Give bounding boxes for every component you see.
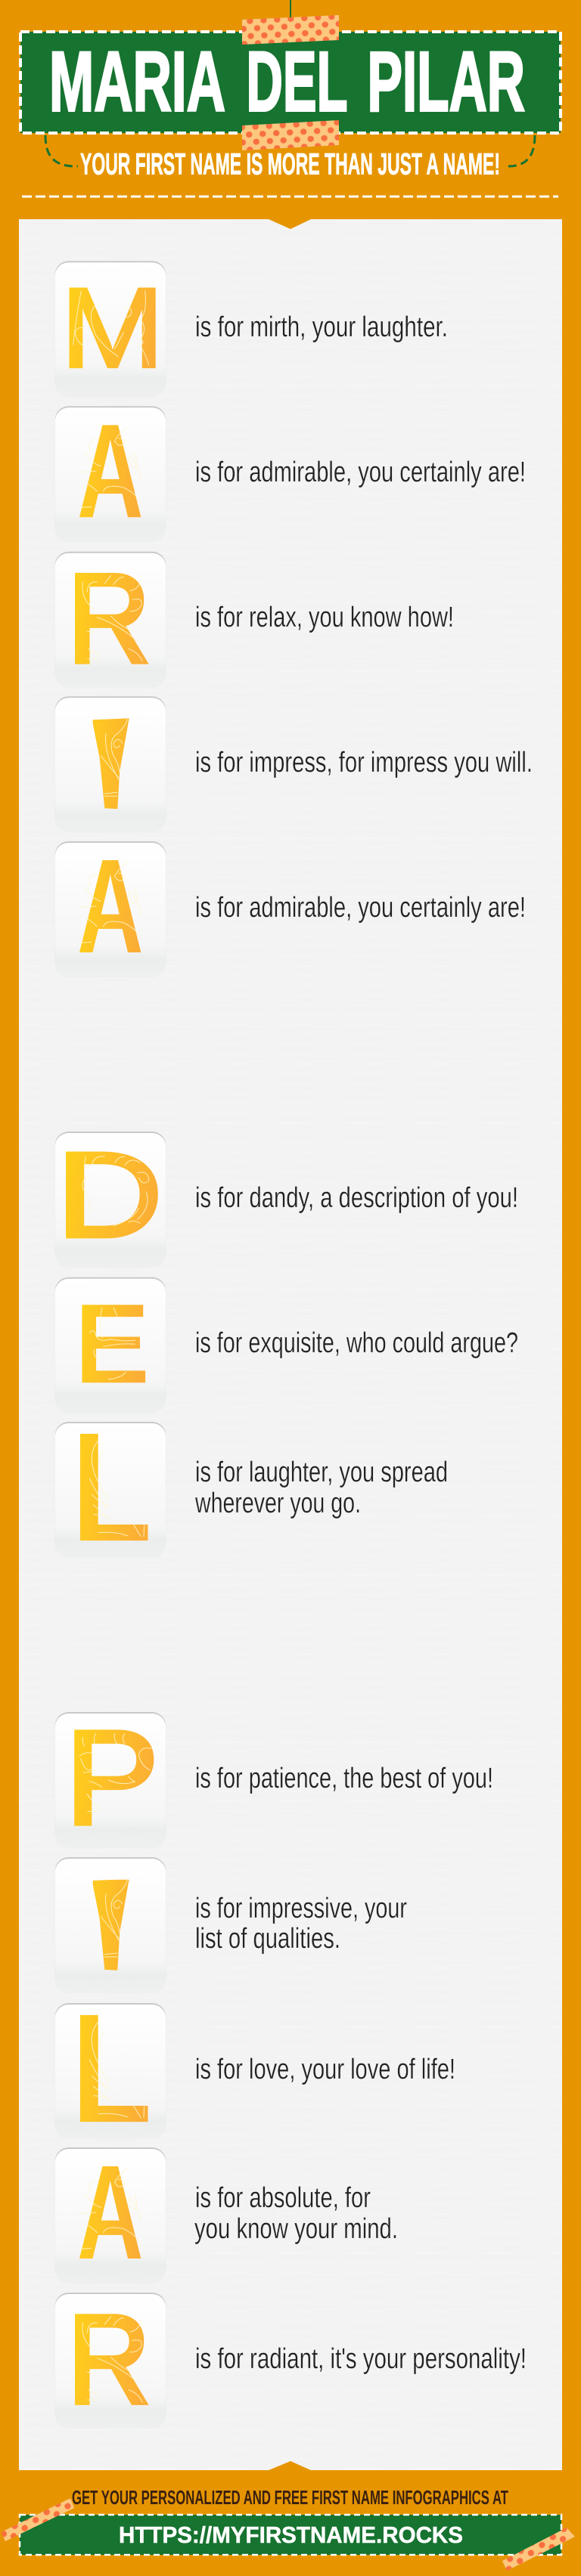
notch: bottom [269, 2461, 311, 2470]
icon: letter A: A [77, 2138, 144, 2288]
hanging string [290, 0, 291, 18]
title [49, 35, 525, 128]
title banner [20, 32, 561, 133]
row: E [55, 1277, 518, 1413]
text: R: is for relax, you know how! [195, 602, 454, 633]
icon: letter I [92, 1879, 129, 1971]
footer [2, 2486, 575, 2571]
icon: letter A: A [77, 398, 144, 546]
text: P: is for patience, the best of you! [195, 1763, 493, 1794]
row: M [55, 261, 448, 397]
tile [55, 552, 166, 688]
tape: left [2, 2498, 74, 2541]
row: I [55, 690, 533, 837]
text: I: list of qualities. [195, 1923, 340, 1955]
text: I: is for impressive, your [195, 1893, 407, 1924]
tile [55, 1277, 166, 1413]
tape: bottom [242, 120, 339, 150]
icon: letter I [92, 718, 129, 809]
row: L [55, 1404, 448, 1570]
title: MARIA [49, 35, 225, 128]
tile [55, 406, 166, 542]
icon: letter I: I [76, 1851, 147, 1999]
header [20, 0, 561, 181]
icon: letter P: P [65, 1702, 159, 1853]
text: L: wherever you go. [194, 1488, 361, 1519]
row: L [55, 1986, 455, 2151]
row: A [55, 2138, 398, 2288]
text: A [194, 2182, 398, 2245]
tile [55, 1422, 166, 1558]
url banner [20, 2515, 561, 2555]
icon: letter I: I [76, 690, 147, 837]
row: R [55, 548, 454, 689]
text: M: is for mirth, your laughter. [195, 311, 448, 343]
row: A [55, 398, 526, 546]
tile [55, 1132, 166, 1268]
row: A [55, 832, 526, 982]
icon: letter L: L [71, 1404, 151, 1570]
row: D [55, 1127, 518, 1268]
tile [55, 2147, 166, 2283]
url: HTTPS://MYFIRSTNAME.ROCKS [119, 2522, 463, 2548]
notch: top [269, 219, 311, 229]
icon: letter D: D [56, 1127, 163, 1262]
bracket: left [45, 135, 78, 166]
title: DEL [247, 35, 348, 128]
row: I [55, 1851, 407, 1999]
text: A: is for absolute, for [195, 2182, 371, 2214]
icon: letter L: L [71, 1986, 151, 2151]
icon: letter M: M [61, 265, 164, 392]
tile [55, 2293, 166, 2429]
text: I [195, 1893, 407, 1955]
tape: right [502, 2528, 575, 2571]
tape: top [242, 15, 339, 45]
tile [55, 2003, 166, 2139]
tile [55, 261, 166, 397]
text: L [194, 1457, 448, 1519]
row: P [55, 1702, 493, 1853]
text: L: is for laughter, you spread [195, 1457, 448, 1488]
tile [55, 841, 166, 977]
icon: letter E: E [75, 1284, 148, 1404]
tile [55, 1857, 166, 1993]
bracket: right [506, 135, 535, 166]
icon: letter R: R [67, 548, 151, 689]
text: L: is for love, your love of life! [195, 2054, 455, 2085]
tile [55, 1712, 166, 1848]
icon: letter R: R [67, 2289, 151, 2430]
tile [55, 696, 166, 832]
divider [22, 195, 558, 198]
row: R [55, 2289, 527, 2430]
icon: letter A: A [77, 832, 144, 982]
text: A: you know your mind. [194, 2213, 398, 2245]
